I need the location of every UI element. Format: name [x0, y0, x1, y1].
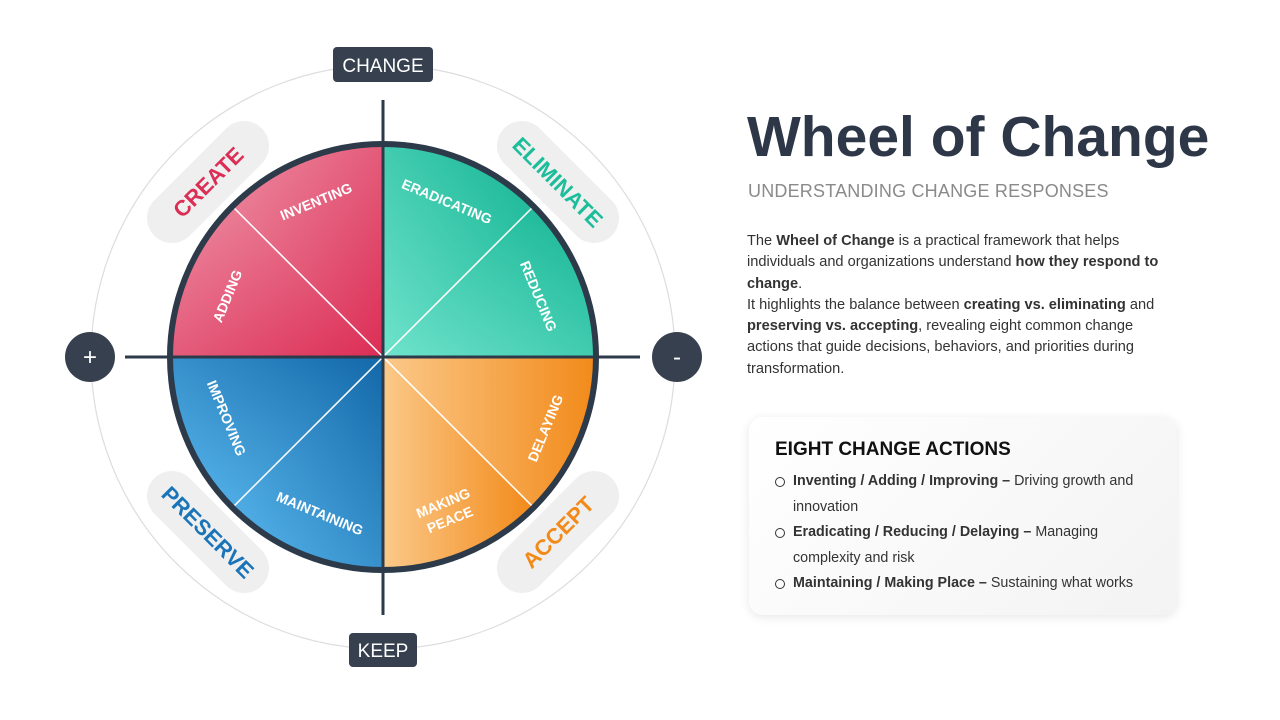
sector labels: DELAYING [524, 392, 566, 464]
description: It highlights the balance between creating vs. eliminating and preserving vs. accepting, revealing eight common change actions that guide decisions, behaviors, and priorities during transformation. [747, 297, 1154, 377]
description [747, 233, 1158, 377]
sector labels [204, 176, 566, 538]
card list [775, 473, 1133, 591]
icon: plus: + [83, 344, 97, 371]
sector labels: PEACE [425, 503, 475, 536]
label: CHANGE: CHANGE [342, 56, 424, 77]
pill: ACCEPT: ACCEPT [518, 491, 600, 573]
sector labels: INVENTING [278, 179, 354, 223]
pill: PRESERVE: PRESERVE [157, 481, 259, 583]
pill: CREATE [137, 111, 279, 253]
card list: Maintaining / Making Place – Sustaining what works [793, 575, 1133, 591]
label: CHANGE [333, 47, 433, 82]
pill: ELIMINATE: ELIMINATE [507, 132, 608, 233]
pill: CREATE: CREATE [168, 142, 249, 223]
label: KEEP [349, 633, 417, 667]
wheel diagram [65, 47, 702, 667]
sector labels: MAINTAINING [274, 488, 366, 538]
card list: Inventing / Adding / Improving – Driving growth and innovation [793, 473, 1133, 514]
card: eight change actions [749, 417, 1177, 615]
pill: ELIMINATE [487, 111, 629, 253]
title: Wheel of Change [747, 105, 1209, 169]
sector labels: IMPROVING [204, 378, 249, 458]
sector labels: ADDING [209, 267, 245, 325]
label: KEEP: KEEP [358, 641, 408, 662]
sector labels: REDUCING [517, 259, 560, 334]
icon: minus [652, 332, 702, 382]
card list: Eradicating / Reducing / Delaying – Managing complexity and risk [793, 524, 1098, 566]
pill: PRESERVE [137, 461, 279, 603]
pill: ACCEPT [487, 461, 629, 603]
icon: plus [65, 332, 115, 382]
card heading: EIGHT CHANGE ACTIONS [775, 439, 1011, 460]
sectors [171, 145, 595, 569]
subtitle: UNDERSTANDING CHANGE RESPONSES [748, 181, 1109, 201]
description: The Wheel of Change is a practical framework that helps individuals and organizations understand how they respond to change. [747, 233, 1158, 292]
sector labels: ERADICATING [399, 176, 495, 227]
sector labels: MAKING [414, 485, 472, 521]
icon: minus: - [673, 344, 681, 371]
